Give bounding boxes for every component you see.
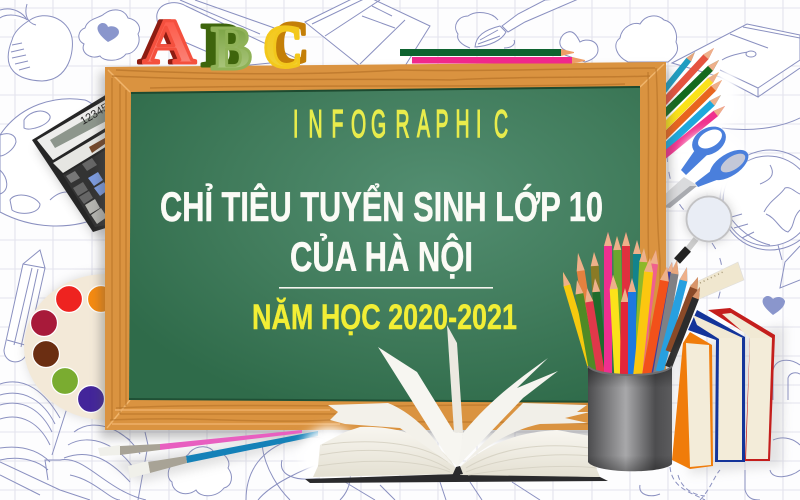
pencil: dark green xyxy=(657,58,721,121)
pencil: pink xyxy=(635,249,660,374)
scissors xyxy=(664,121,753,210)
right spike pages xyxy=(458,358,558,466)
paint: crimson xyxy=(30,310,58,336)
centre spike page xyxy=(447,325,463,433)
pencil: blue front xyxy=(628,278,636,376)
pencil: green xyxy=(573,279,598,379)
brush: pink xyxy=(98,430,302,456)
ABC letters xyxy=(138,6,309,83)
pencils on top of frame xyxy=(400,49,585,64)
letter C: C xyxy=(272,10,309,76)
magnifying glass xyxy=(677,195,733,261)
pencil cup xyxy=(588,366,672,471)
pencil: pink xyxy=(412,57,585,64)
letter B: B xyxy=(211,15,252,83)
paint: green xyxy=(52,368,78,394)
books xyxy=(672,308,785,474)
school year: NĂM HỌC 2020-2021 xyxy=(252,298,517,337)
pencil: dark green xyxy=(591,278,608,378)
left raised page xyxy=(328,403,455,467)
pencil: salmon xyxy=(574,252,600,372)
wooden frame xyxy=(100,62,670,438)
pencil: yellow xyxy=(657,70,721,134)
pencil: purple xyxy=(649,261,675,376)
doodle: cloud and ball bottom xyxy=(168,437,660,500)
pencil: light blue xyxy=(656,266,691,372)
letter C: C xyxy=(263,14,303,80)
doodle: globe xyxy=(720,150,800,288)
left spike page xyxy=(378,347,463,467)
paintbrushes xyxy=(98,430,320,482)
pencil: teal xyxy=(633,240,641,375)
pencil: lime xyxy=(633,248,648,373)
pencil: red front xyxy=(620,288,629,376)
pencil: grey xyxy=(653,259,681,374)
pencil: light green xyxy=(613,236,623,377)
pencil: orange xyxy=(642,266,671,376)
doodle: graduation cap xyxy=(672,24,800,130)
doodle: paintbrush xyxy=(456,0,583,48)
pencil: olive xyxy=(590,252,604,372)
book: blue xyxy=(688,310,745,462)
divider under title xyxy=(279,287,493,289)
right raised page xyxy=(460,403,590,467)
paint: red xyxy=(56,286,82,312)
doodle: clouds top right xyxy=(560,16,678,62)
title line 1: CHỈ TIÊU TUYỂN SINH LỚP 10 xyxy=(160,182,603,230)
book: red xyxy=(708,308,775,461)
pencil: red xyxy=(583,287,605,377)
pencil: blue xyxy=(660,92,723,152)
pencil: yellow xyxy=(560,271,598,378)
pencil: green xyxy=(400,49,574,56)
pencil: yellow front xyxy=(609,275,622,375)
letter B: B xyxy=(201,12,243,80)
doodle: backpack xyxy=(670,360,800,500)
open book xyxy=(300,325,608,483)
palette with paints xyxy=(24,272,192,422)
pencil: brown xyxy=(666,276,702,353)
paint: brown xyxy=(32,340,60,368)
title line 2: CỦA HÀ NỘI xyxy=(290,232,473,280)
doodle: palette outline xyxy=(0,99,105,226)
ruler xyxy=(690,262,744,300)
brush: blue xyxy=(128,431,318,478)
book cover xyxy=(305,474,608,483)
doodle: rolled paper and ruler xyxy=(157,0,430,66)
heading: INFOGRAPHIC: INFOGRAPHIC xyxy=(293,102,508,146)
pencil: black xyxy=(665,286,703,368)
doodle: thought cloud with heart xyxy=(79,10,140,60)
pencil: red tall xyxy=(622,232,630,377)
letter A: A xyxy=(143,6,196,77)
calculator xyxy=(32,91,112,240)
doodle: open notebook bottom left xyxy=(0,382,148,500)
left page stack xyxy=(313,427,456,477)
doodle: pencil left xyxy=(4,250,45,362)
pencil: magenta xyxy=(604,232,612,378)
doodle: right side heart xyxy=(763,296,785,315)
paint: orange xyxy=(88,286,114,312)
chalkboard xyxy=(129,87,640,402)
letter A: A xyxy=(138,6,192,77)
pencils in cup xyxy=(560,232,744,379)
doodle: apple xyxy=(0,4,72,81)
pencil: orange xyxy=(657,78,724,144)
book spine xyxy=(452,466,463,476)
book: orange xyxy=(672,332,713,469)
calculator: 12345 xyxy=(78,102,111,128)
pencil: yellow right xyxy=(633,258,654,378)
pencil: pink xyxy=(656,103,727,163)
doodle: dashed arc xyxy=(667,155,722,300)
coloured pencils fan, right of frame xyxy=(655,46,738,170)
paint: purple xyxy=(78,386,104,412)
right page stack xyxy=(460,430,600,477)
pencil: red xyxy=(657,46,717,109)
pencil: teal xyxy=(655,50,697,101)
